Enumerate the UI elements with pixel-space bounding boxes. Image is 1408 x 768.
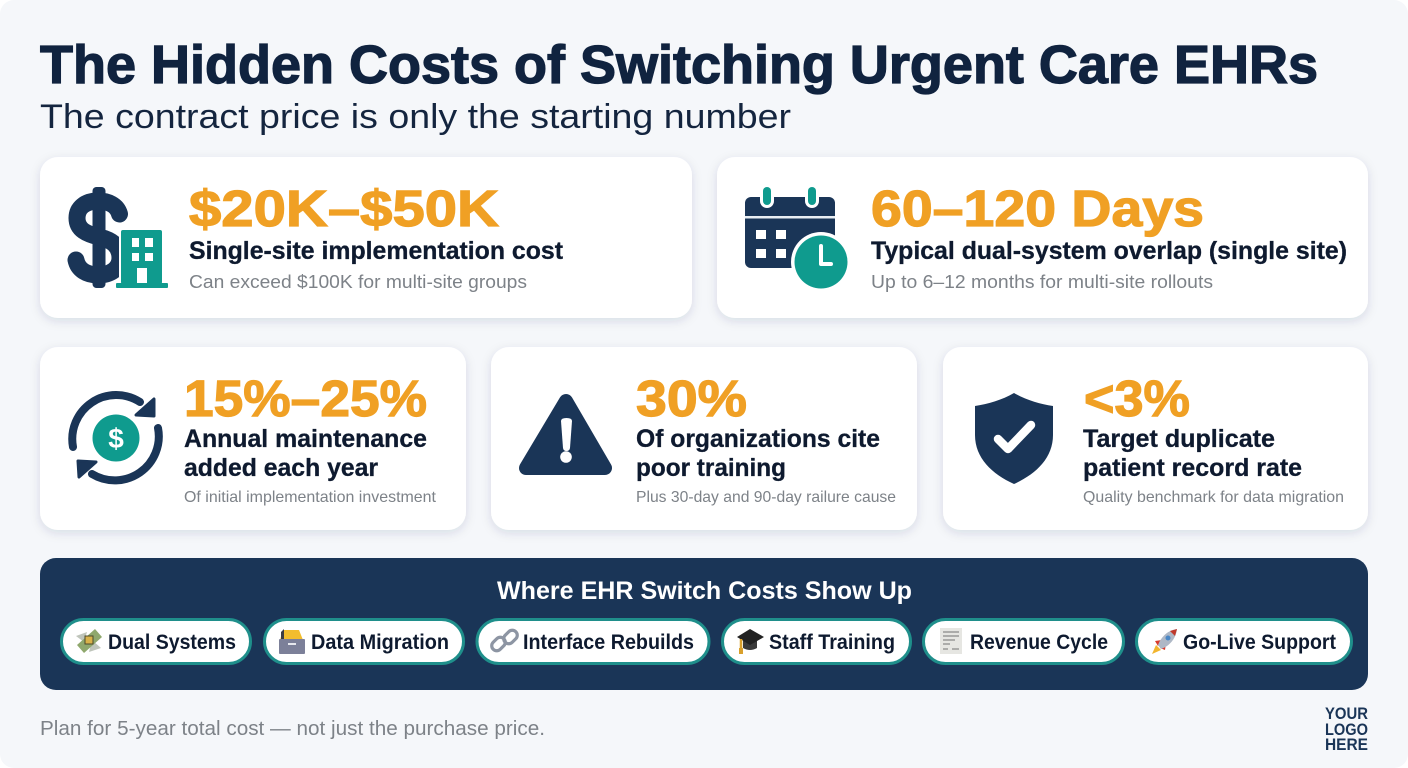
panel: where costs show up — [40, 558, 1368, 690]
note: quality benchmark: Quality benchmark for data migration — [1083, 489, 1344, 506]
icon: receipt — [940, 628, 962, 654]
label: target duplicate patient record rate: Target duplicate — [1083, 425, 1275, 453]
icon: warning triangle — [526, 401, 605, 468]
chip: staff training: Staff Training — [769, 631, 895, 654]
label: organizations cite poor training — [636, 425, 880, 482]
label: organizations cite poor training: Of organizations cite — [636, 425, 880, 453]
label: single-site implementation cost: Single-site implementation cost — [189, 237, 564, 265]
label: typical dual-system overlap: Typical dual-system overlap (single site) — [871, 237, 1347, 265]
note: initial investment: Of initial implementation investment — [184, 489, 437, 506]
note: failure cause: Plus 30-day and 90-day railure cause — [636, 489, 896, 506]
icon: shield with check — [975, 393, 1053, 484]
logo placeholder — [1325, 705, 1368, 754]
label: target duplicate patient record rate: patient record rate — [1083, 454, 1302, 482]
chip: revenue cycle: Revenue Cycle — [970, 631, 1108, 654]
icon: chain link — [490, 628, 519, 653]
label: annual maintenance added each year: added each year — [184, 454, 378, 482]
chip: dual systems: Dual Systems — [108, 631, 236, 654]
stat: $20K–$50K: $20K–$50K — [189, 180, 499, 237]
icon: dollar cycle arrows — [72, 395, 159, 480]
chip: interface rebuilds: Interface Rebuilds — [523, 631, 694, 654]
logo placeholder: YOUR — [1325, 705, 1368, 723]
chip: staff training — [722, 620, 910, 664]
chip: data migration — [264, 620, 464, 664]
label: organizations cite poor training: poor training — [636, 454, 786, 482]
note: multi-site cost: Can exceed $100K for multi-site groups — [189, 272, 527, 292]
icon: file cabinet — [279, 629, 305, 654]
chip: data migration: Data Migration — [311, 631, 449, 654]
footer note: Plan for 5-year total cost — not just the purchase price. — [40, 718, 545, 740]
icon: graduation cap — [737, 629, 764, 654]
stat: 30%: 30% — [636, 370, 747, 427]
stat: 15%–25%: 15%–25% — [184, 370, 427, 427]
stat: <3%: <3% — [1084, 370, 1190, 427]
logo placeholder: HERE — [1325, 736, 1368, 754]
icon: dollar sign and building — [76, 187, 170, 290]
icon: rocket — [1152, 629, 1177, 654]
banner heading: Where EHR Switch Costs Show Up — [497, 577, 912, 605]
panel: duplicate record rate — [943, 347, 1368, 530]
label: target duplicate patient record rate — [1083, 425, 1302, 482]
label: annual maintenance added each year: Annual maintenance — [184, 425, 427, 453]
logo placeholder: LOGO — [1325, 721, 1368, 739]
chip: go-live support: Go-Live Support — [1183, 631, 1336, 654]
panel: implementation cost — [40, 157, 692, 318]
subtitle: The contract price is only the starting number — [40, 98, 791, 136]
icon: money with wings — [76, 629, 102, 653]
chip: interface rebuilds — [477, 620, 709, 664]
chip: revenue cycle — [924, 620, 1124, 664]
panel: poor training — [491, 347, 917, 530]
chip: dual systems — [62, 620, 250, 664]
label: annual maintenance added each year — [184, 425, 427, 482]
note: multi-site rollouts: Up to 6–12 months for multi-site rollouts — [871, 272, 1213, 292]
title: The Hidden Costs of Switching Urgent Care EHRs — [40, 35, 1318, 95]
panel: dual-system overlap — [717, 157, 1368, 318]
icon: dollar cycle arrows: $ — [108, 423, 124, 454]
icon: calendar with clock — [745, 184, 851, 292]
chip: go-live support — [1136, 620, 1352, 664]
panel: annual maintenance — [40, 347, 466, 530]
stat: 60–120 Days: 60–120 Days — [871, 180, 1204, 237]
